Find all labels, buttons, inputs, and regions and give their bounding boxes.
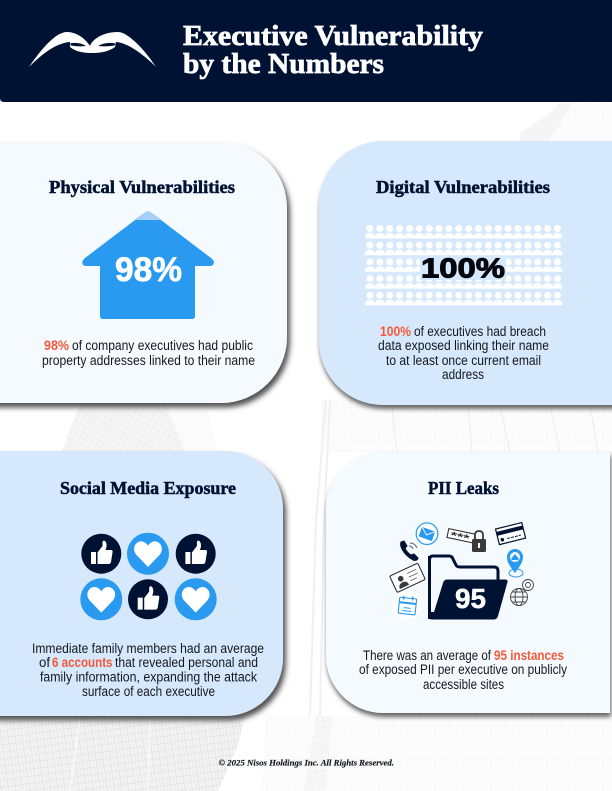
icon group: likes and hearts xyxy=(80,533,217,620)
body text: social: family information, expanding the attack xyxy=(40,670,257,684)
icon: location pin xyxy=(507,549,523,577)
body text: digital: of executives had breach xyxy=(414,324,546,339)
icon: password lock xyxy=(446,529,486,552)
body text: social: surface of each executive xyxy=(82,684,215,699)
icon cluster: exposed data folder 95 xyxy=(390,523,534,620)
body text: digital xyxy=(378,324,549,382)
body text: physical: property addresses linked to their name xyxy=(42,353,255,368)
title: by the Numbers xyxy=(183,49,384,80)
icon: grid of people 100%: 100% xyxy=(421,252,505,284)
title xyxy=(183,21,483,80)
heading: physical: Physical Vulnerabilities xyxy=(49,177,235,197)
body text: PII xyxy=(359,648,567,692)
body text: PII: 95 instances xyxy=(494,648,564,663)
icon: folder xyxy=(428,556,508,620)
body text: social: Immediate family members had an average xyxy=(32,641,264,656)
icon: ID card xyxy=(390,563,425,592)
icon: house 98%: 98% xyxy=(115,251,182,289)
body text: physical xyxy=(42,338,255,368)
panel: PII leaks xyxy=(326,452,610,713)
body text: digital: to at least once current email xyxy=(386,353,541,368)
logo: white bird wings xyxy=(29,32,156,67)
body text: social: of xyxy=(39,655,50,670)
icon: credit card xyxy=(496,523,526,545)
body text: social: 6 accounts xyxy=(52,655,112,670)
body text: social: that revealed personal and xyxy=(115,655,258,670)
title: Executive Vulnerability xyxy=(183,21,483,52)
icon: password lock: *** xyxy=(449,530,470,545)
body text: physical: of company executives had public xyxy=(72,338,253,353)
body text: social xyxy=(32,641,264,699)
icon: folder: 95 xyxy=(455,583,486,614)
body text: PII: accessible sites xyxy=(423,677,504,692)
heading: digital: Digital Vulnerabilities xyxy=(376,177,550,197)
body text: digital: data exposed linking their name xyxy=(378,338,549,353)
footer copyright: © 2025 Nisos Holdings Inc. All Rights Reserved. xyxy=(218,758,394,768)
icon: house 98% xyxy=(82,211,214,319)
icon: envelope xyxy=(416,523,438,544)
heading: social: Social Media Exposure xyxy=(60,478,236,498)
body text: digital: 100% xyxy=(380,324,411,339)
panel: digital vulnerabilities xyxy=(319,141,612,405)
body text: PII: of exposed PII per executive on publicly xyxy=(359,662,567,677)
panel: social media exposure xyxy=(0,451,283,716)
body text: digital: address xyxy=(442,367,484,382)
icon: calendar xyxy=(393,592,421,620)
body text: physical: 98% xyxy=(44,338,69,353)
icon: globe with pin xyxy=(510,580,534,606)
heading: PII: PII Leaks xyxy=(428,478,499,498)
body text: PII: There was an average of xyxy=(363,648,491,663)
icon: phone xyxy=(401,541,418,560)
panel: physical vulnerabilities xyxy=(0,142,287,403)
icon: grid of people 100% xyxy=(365,225,562,306)
header band xyxy=(0,0,612,102)
